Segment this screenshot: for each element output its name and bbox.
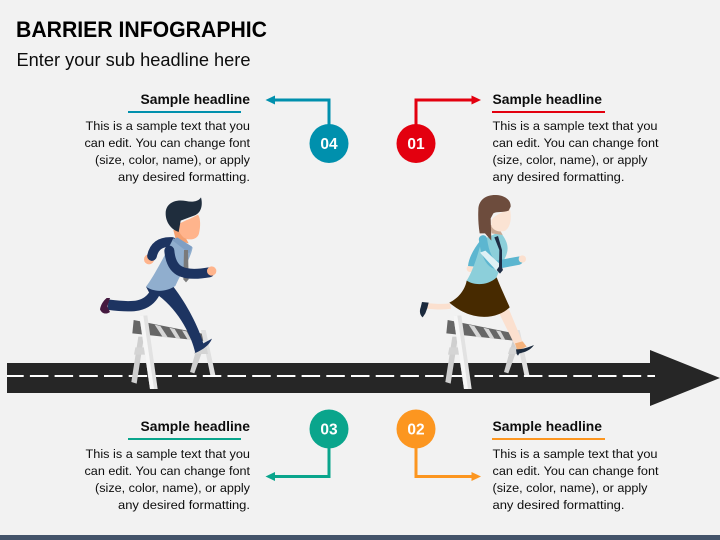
road arrow (7, 350, 720, 406)
body text 02: any desired formatting. (492, 498, 624, 512)
connector arrow 01 (416, 96, 481, 125)
connector arrow 03 (266, 448, 329, 481)
number badge 01 (396, 124, 436, 163)
body text 03: any desired formatting. (118, 498, 250, 512)
connector arrow 02 (416, 448, 481, 481)
body text 03: This is a sample text that you (86, 447, 250, 461)
body text 01 (492, 119, 659, 184)
body text 01: (size, color, name), or apply (492, 153, 648, 167)
footer bar (0, 535, 720, 540)
body text 02: can edit. You can change font (492, 464, 659, 478)
headline 01: Sample headline (492, 92, 602, 107)
number badge 03 (310, 410, 348, 448)
body text 02: (size, color, name), or apply (492, 481, 648, 495)
body text 01: any desired formatting. (492, 170, 624, 184)
body text 01: This is a sample text that you (492, 119, 658, 133)
body text 04: any desired formatting. (118, 170, 250, 184)
number badge 04 (310, 124, 348, 163)
body text 04: (size, color, name), or apply (95, 153, 251, 167)
underline 04 (128, 111, 241, 113)
underline 02 (492, 438, 605, 440)
body text 04: can edit. You can change font (84, 136, 251, 150)
connector arrow 04 (266, 96, 329, 125)
panel 03 (84, 410, 348, 512)
body text 04 (84, 119, 251, 184)
headline 02: Sample headline (492, 419, 602, 434)
underline 03 (128, 438, 241, 440)
panel 02 (396, 410, 659, 512)
number badge 02 (396, 410, 436, 448)
headline 04: Sample headline (140, 92, 250, 107)
figure: running man over barrier (100, 197, 216, 389)
body text 02 (492, 447, 659, 512)
body text 03: can edit. You can change font (84, 464, 251, 478)
headline 03: Sample headline (140, 419, 250, 434)
subtitle: Enter your sub headline here (16, 50, 250, 70)
number badge 03: 03 (320, 422, 338, 438)
body text 02: This is a sample text that you (492, 447, 658, 461)
figure: running woman over barrier (420, 195, 534, 389)
number badge 01: 01 (407, 136, 425, 153)
body text 01: can edit. You can change font (492, 136, 659, 150)
panel 04 (84, 92, 348, 184)
panel 01 (396, 92, 659, 184)
body text 03: (size, color, name), or apply (95, 481, 251, 495)
body text 04: This is a sample text that you (86, 119, 250, 133)
body text 03 (84, 447, 251, 512)
number badge 02: 02 (407, 422, 425, 438)
underline 01 (492, 111, 605, 113)
number badge 04: 04 (320, 136, 338, 153)
title: BARRIER INFOGRAPHIC (16, 17, 267, 42)
